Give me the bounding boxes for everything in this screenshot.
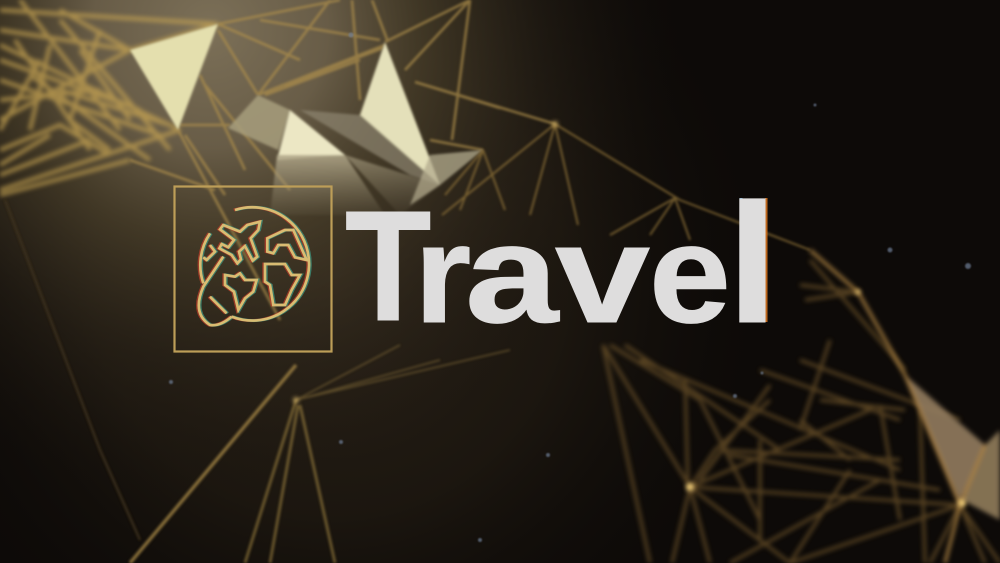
icon: globe teal fringe (200, 207, 310, 325)
network: right edge triangle (810, 250, 1000, 563)
title: Travel: T (345, 178, 431, 354)
network: bright triangles (130, 24, 483, 215)
network: center node (442, 124, 810, 250)
network: lower-left (5, 200, 510, 563)
network: upper-center lines (130, 0, 555, 320)
network: upper-left bright mesh (0, 0, 218, 195)
title: Travel: l (727, 169, 778, 359)
dust particles (169, 32, 971, 542)
title: Travel: v (555, 196, 650, 352)
icon: globe main gold lines (199, 207, 309, 325)
icon: globe red fringe (198, 207, 308, 325)
title: Travel: r (414, 196, 471, 352)
node highlights (294, 122, 966, 507)
network: lower-right mesh (603, 260, 1000, 563)
title: Travel: e (649, 196, 731, 352)
icon frame (174, 186, 332, 352)
icon: framed globe with airplane (174, 186, 332, 352)
title: Travel (345, 169, 778, 359)
title: Travel: a (465, 195, 560, 352)
